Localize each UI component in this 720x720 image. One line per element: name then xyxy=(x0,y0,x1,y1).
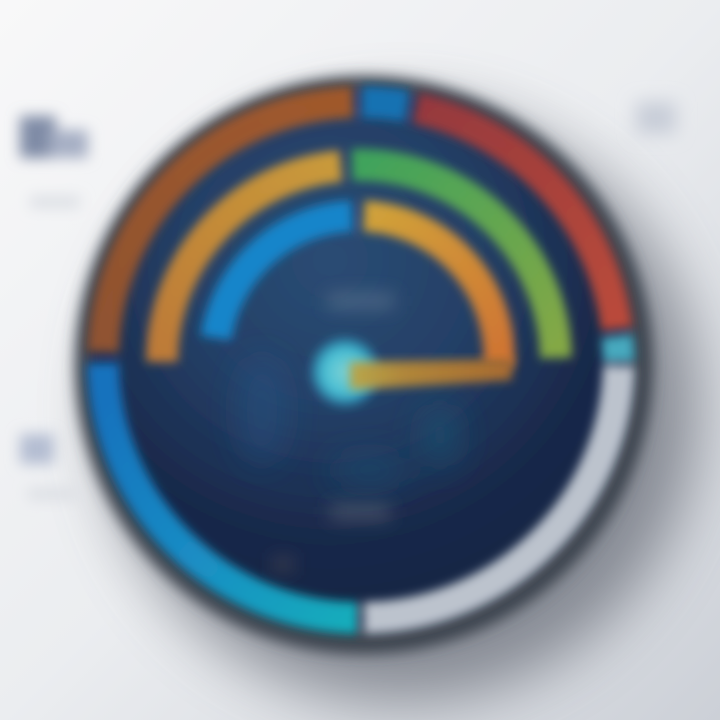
middle ring segments xyxy=(162,165,556,362)
outer ring segments xyxy=(103,102,619,618)
left bottom label xyxy=(20,434,78,500)
face glow xyxy=(236,355,460,486)
gauge needle xyxy=(350,359,512,390)
left top label xyxy=(20,116,88,208)
gauge drop shadow xyxy=(102,107,698,703)
gauge dial xyxy=(75,76,653,654)
right top label xyxy=(636,102,676,134)
dial face xyxy=(91,90,631,630)
dial rim xyxy=(75,76,653,654)
inner ring segments xyxy=(216,216,499,366)
faint centre labels xyxy=(272,294,394,570)
gauge hub xyxy=(310,337,380,407)
